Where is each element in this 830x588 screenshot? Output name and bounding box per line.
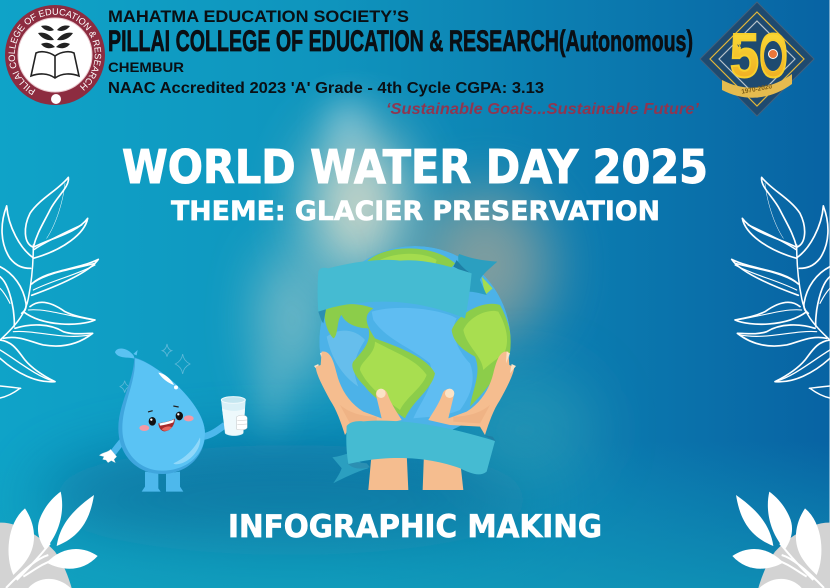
face <box>149 417 156 426</box>
logo ring text: PILLAI COLLEGE OF EDUCATION & RESEARCH <box>8 8 102 96</box>
logo leaves <box>38 25 73 48</box>
title: WORLD WATER DAY 2025 <box>122 140 708 194</box>
glass hand <box>237 415 247 430</box>
location: CHEMBUR <box>108 59 184 75</box>
glass of water <box>221 397 246 436</box>
right bottom sprig <box>732 492 830 588</box>
left fern <box>0 177 98 398</box>
globe held in hands <box>314 246 516 490</box>
bottom ribbon <box>332 421 496 483</box>
right fern <box>732 177 830 398</box>
accreditation: NAAC Accredited 2023 'A' Grade - 4th Cycle CGPA: 3.13 <box>108 80 544 97</box>
arms <box>113 438 125 453</box>
legs <box>142 472 161 492</box>
glove <box>99 449 117 463</box>
badge numeral: 50 <box>730 22 788 91</box>
header text block <box>108 8 700 118</box>
left bottom sprig <box>0 492 98 588</box>
water drop mascot <box>99 344 247 492</box>
splash <box>115 348 134 359</box>
50 years badge <box>700 2 814 116</box>
50 years badge: YEARS <box>737 43 751 48</box>
badge ribbon <box>722 74 792 98</box>
highlights <box>158 373 174 385</box>
globe <box>319 246 511 437</box>
subtitle: THEME: GLACIER PRESERVATION <box>171 196 660 227</box>
top ribbon <box>318 254 497 323</box>
college logo <box>5 5 105 105</box>
hands <box>314 351 516 490</box>
50 years badge: 1970-2020 <box>741 83 773 96</box>
society name: MAHATMA EDUCATION SOCIETY’S <box>108 8 409 26</box>
motto: ‘Sustainable Goals...Sustainable Future’ <box>386 101 700 118</box>
sparkles <box>120 344 190 393</box>
logo book <box>31 52 79 78</box>
event label: INFOGRAPHIC MAKING <box>228 509 602 545</box>
body <box>118 357 205 474</box>
